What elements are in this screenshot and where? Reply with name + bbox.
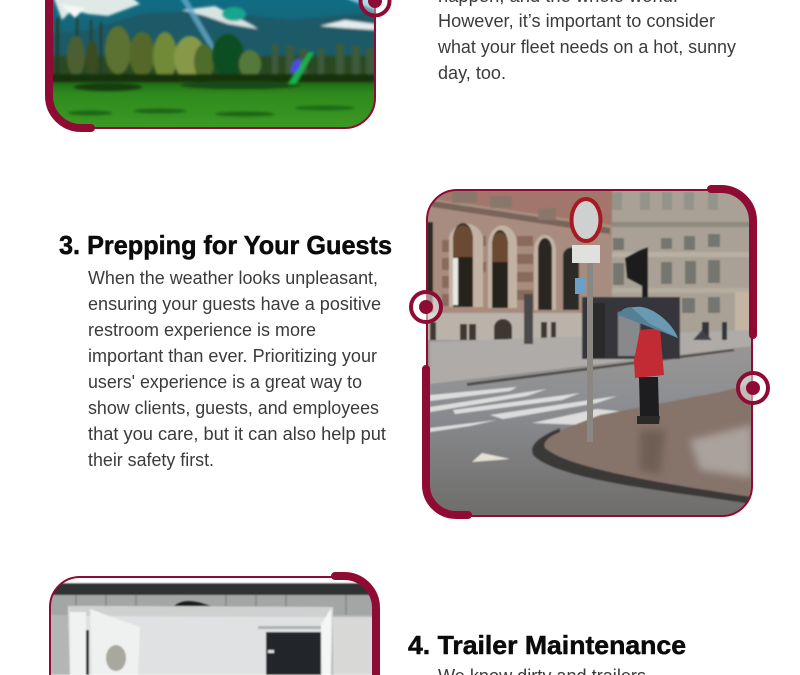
accent: top-right corner arc <box>335 576 376 675</box>
photo border <box>427 190 752 516</box>
text block: section 3 paragraph <box>88 268 386 470</box>
arched windows <box>449 224 483 307</box>
pedestrians far <box>702 322 727 340</box>
bollard <box>524 294 533 344</box>
right building windows <box>613 234 720 313</box>
panel: rainy street photo (section 3) <box>411 189 768 516</box>
icon: target marker <box>360 0 390 16</box>
sidewalk and kerb <box>532 384 752 497</box>
text block: section 3 paragraph: their safety first. <box>88 450 214 470</box>
icon: right target marker <box>738 373 768 403</box>
heading: 4. Trailer Maintenance: 4. Trailer Maintenance <box>408 630 686 660</box>
text block: section 3 paragraph: that you care, but it can also help put <box>88 424 386 444</box>
text block: end of section 2 paragraph: However, it’s important to consider <box>438 11 715 31</box>
text block: end of section 2 paragraph <box>437 0 736 83</box>
road arrow <box>472 453 510 462</box>
crosswalk <box>430 387 627 432</box>
text block: section 3 paragraph: restroom experience is more <box>88 320 316 340</box>
person with red jacket <box>634 328 664 378</box>
traffic light <box>625 247 648 297</box>
photo: green field and stormy sky <box>49 0 375 130</box>
photo border <box>49 0 375 128</box>
street <box>427 340 752 516</box>
photo: white restroom trailer <box>50 577 376 675</box>
panel: landscape photo (section 2) <box>49 0 390 130</box>
panel: trailer photo (section 4) <box>50 576 376 675</box>
tree line <box>53 54 368 76</box>
heading: 3. Prepping for Your Guests: 3. Prepping for Your Guests <box>59 230 392 260</box>
text block: end of section 2 paragraph: day, too. <box>438 63 506 83</box>
bus shelter <box>582 297 680 359</box>
accent: bottom-left corner arc <box>426 369 468 515</box>
sign post <box>587 262 593 442</box>
text block: section 3 paragraph: When the weather looks unpleasant, <box>88 268 378 288</box>
text block: section 3 paragraph: users' experience is a great way to <box>88 372 362 392</box>
umbrella <box>618 307 678 338</box>
ground floor with arches and bicycles <box>427 313 587 341</box>
photo border <box>50 577 376 675</box>
accent: top-right corner arc <box>711 189 753 335</box>
right building <box>612 191 749 333</box>
left brick building <box>428 199 612 313</box>
photo: person with umbrella on a rainy street <box>427 190 752 516</box>
accent: bottom-left corner arc <box>49 0 91 128</box>
text block: section 3 paragraph: important than ever. Prioritizing your <box>88 346 377 366</box>
icon: left target marker <box>411 292 441 322</box>
text block: end of section 2 paragraph: what your fleet needs on a hot, sunny <box>437 37 736 57</box>
text block: section 3 paragraph: show clients, guests, and employees <box>88 398 379 418</box>
text block: section 3 paragraph: ensuring your guests have a positive <box>88 294 381 314</box>
